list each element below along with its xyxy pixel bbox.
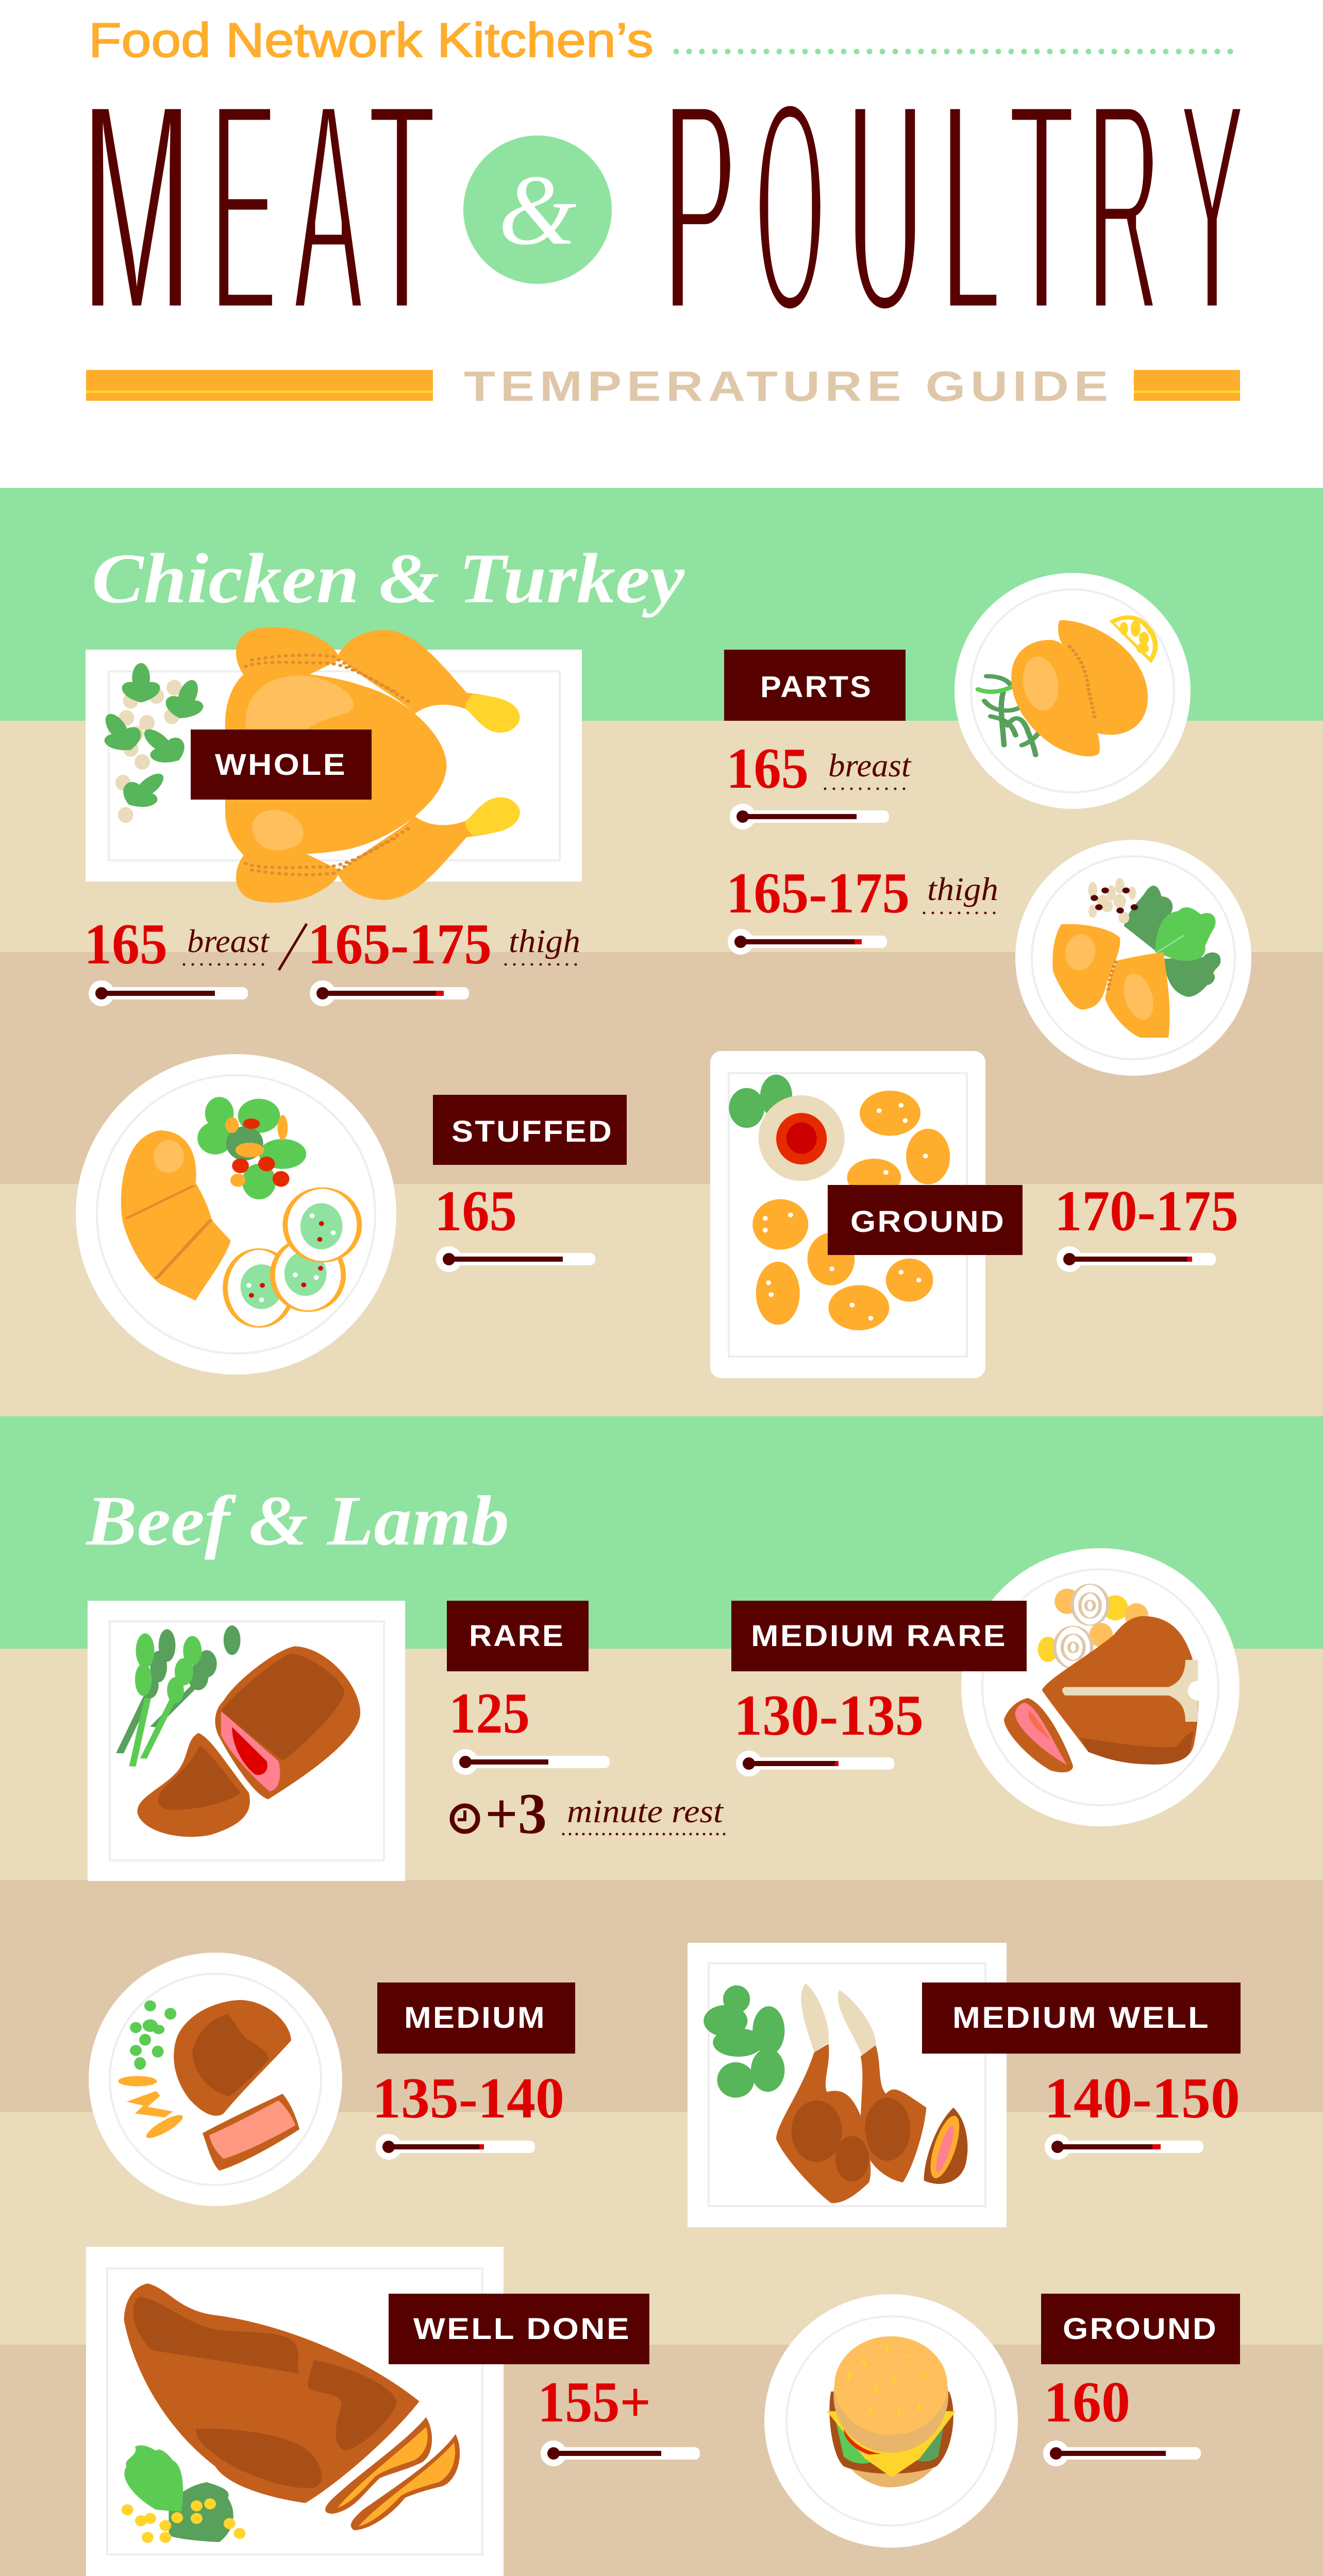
ampersand badge	[463, 135, 612, 284]
label: parts: PARTS	[760, 670, 873, 704]
rest note: +3 minute rest	[452, 1782, 726, 1846]
title: T	[369, 37, 433, 376]
temp: 165 breast: breast	[187, 923, 270, 959]
temp: 165-175 thigh: thigh	[509, 923, 580, 959]
temp: 165 breast	[84, 912, 270, 976]
thermometer	[730, 804, 889, 829]
heading: chicken and turkey: Chicken & Turkey	[92, 539, 685, 618]
temp: parts 165-175 thigh: thigh	[927, 871, 998, 907]
illustration: whole turkey on tray	[86, 627, 582, 903]
thermometer	[1043, 2441, 1201, 2466]
rest note: +3 minute rest: +3	[485, 1782, 547, 1846]
thermometer	[728, 929, 887, 955]
label: medium well	[922, 1982, 1241, 2054]
temp: parts 165 breast: 165	[726, 737, 809, 801]
title: O	[756, 37, 825, 376]
title: P	[664, 37, 736, 376]
label: medium: MEDIUM	[404, 2001, 546, 2035]
rest note: +3 minute rest: minute rest	[567, 1793, 724, 1829]
label: parts	[724, 650, 906, 721]
heading: beef and lamb: Beef & Lamb	[85, 1481, 509, 1560]
title: E	[211, 37, 276, 376]
illustration: medium steak plate	[89, 1953, 342, 2206]
title: L	[942, 37, 1000, 376]
temp: parts 165-175 thigh: 165-175	[726, 861, 910, 925]
label: medium rare	[731, 1601, 1027, 1671]
temp: 160: 160	[1044, 2370, 1130, 2434]
label: stuffed	[433, 1095, 627, 1165]
header kicker: Food Network Kitchen’s	[89, 13, 654, 67]
ampersand badge: &	[498, 155, 577, 266]
thermometer	[736, 1751, 894, 1776]
label: ground	[828, 1185, 1023, 1255]
thermometer	[376, 2134, 535, 2160]
illustration: medium well lamb chops tray	[688, 1943, 1007, 2227]
subtitle: TEMPERATURE GUIDE	[464, 362, 1113, 410]
thermometer	[436, 1246, 595, 1272]
title: M	[81, 37, 192, 376]
thermometer	[541, 2441, 700, 2466]
title	[81, 37, 1245, 376]
label: ground beef	[1041, 2294, 1240, 2364]
title: T	[1010, 37, 1074, 376]
temp: 165: 165	[434, 1179, 517, 1243]
slash divider	[279, 924, 307, 970]
title: U	[847, 37, 923, 376]
label: well done: WELL DONE	[413, 2312, 631, 2346]
title: R	[1088, 37, 1160, 376]
temp: 125: 125	[449, 1682, 530, 1745]
title: A	[294, 37, 363, 376]
temp: 130-135: 130-135	[734, 1684, 924, 1748]
illustration: chicken thigh plate	[1015, 840, 1251, 1076]
thermometer	[89, 980, 248, 1006]
label: medium rare: MEDIUM RARE	[751, 1619, 1007, 1653]
illustration: ground chicken tray	[710, 1051, 985, 1378]
illustration: stuffed chicken plate	[76, 1054, 396, 1375]
illustration: rare roast tray	[88, 1601, 405, 1881]
label: ground beef: GROUND	[1063, 2312, 1218, 2346]
temp: 170-175: 170-175	[1054, 1179, 1238, 1243]
temp: 135-140: 135-140	[372, 2066, 564, 2130]
temp: parts 165 breast	[726, 737, 912, 801]
label: rare	[447, 1601, 589, 1671]
illustration: burger plate	[764, 2294, 1018, 2548]
temp: 165 breast: 165	[84, 912, 168, 976]
thermometer	[310, 980, 469, 1006]
label: medium	[377, 1982, 575, 2054]
label: rare: RARE	[469, 1619, 565, 1653]
label: whole: WHOLE	[215, 748, 347, 782]
label: ground: GROUND	[850, 1205, 1006, 1239]
illustration: chicken breast plate	[954, 573, 1191, 809]
temp: 155+: 155+	[538, 2370, 651, 2434]
subtitle	[86, 362, 1240, 410]
label: stuffed: STUFFED	[451, 1115, 613, 1148]
temp: 165-175 thigh: 165-175	[308, 912, 492, 976]
label: medium well: MEDIUM WELL	[952, 2001, 1210, 2035]
label: whole	[191, 730, 372, 800]
temp: 140-150: 140-150	[1044, 2066, 1240, 2130]
thermometer	[453, 1749, 610, 1775]
thermometer	[1057, 1246, 1216, 1272]
label: well done	[389, 2294, 649, 2364]
temp: parts 165 breast: breast	[828, 747, 912, 784]
illustration: well done roast tray	[86, 2247, 504, 2576]
illustration: medium rare t-bone plate	[961, 1548, 1240, 1826]
thermometer	[1045, 2134, 1203, 2160]
